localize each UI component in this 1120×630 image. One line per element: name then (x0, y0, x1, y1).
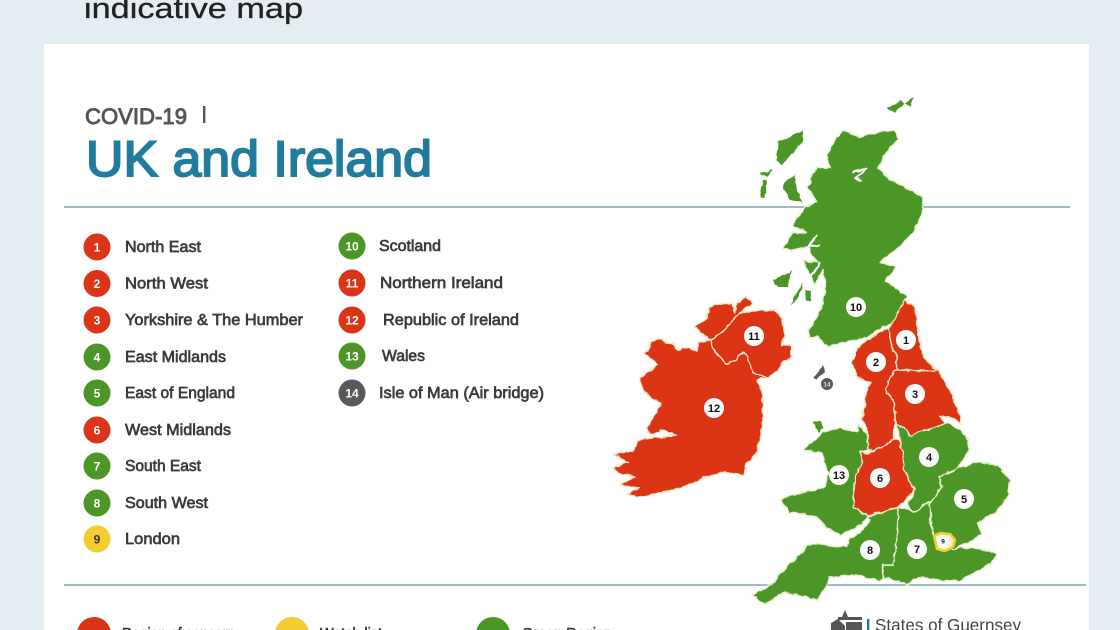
legend item 13: Wales (382, 348, 425, 365)
map region: North East (888, 300, 938, 371)
legend item 12 (338, 306, 519, 334)
map badge 9 (937, 535, 949, 547)
map badge 7 (907, 539, 927, 559)
map badge 5: 5 (961, 494, 967, 506)
legend item 14 (338, 380, 544, 406)
legend item 3 (84, 306, 303, 334)
legend item 5 (84, 380, 235, 406)
legend item 6: 6 (94, 424, 101, 438)
legend item 9: London (125, 531, 180, 548)
legend item 4 (84, 344, 226, 370)
legend item 11: Northern Ireland (380, 275, 503, 292)
legend item 7 (84, 452, 202, 480)
legend item 2 (84, 270, 209, 297)
icon: crest (831, 610, 862, 630)
key item: region of concern (77, 617, 235, 630)
map region: Northern Ireland (710, 310, 792, 377)
legend item 8 (84, 490, 209, 516)
legend item 1: 1 (94, 240, 101, 254)
legend item 12: 12 (345, 314, 359, 328)
legend item 6: West Midlands (125, 422, 231, 439)
map region: London (934, 533, 955, 551)
map badge 11 (744, 326, 764, 346)
map region: East of England (930, 462, 1010, 549)
key: region status (77, 617, 612, 630)
key item: green region (476, 617, 612, 630)
legend item 4: 4 (94, 350, 101, 364)
map badge 14 (821, 378, 833, 390)
map badge 7: 7 (914, 544, 920, 556)
legend item 1: North East (125, 239, 202, 256)
map region: Isle of Man (813, 366, 824, 379)
map badge 8 (860, 540, 880, 560)
map region: North West (852, 328, 897, 450)
legend item 11 (338, 270, 503, 296)
legend item 9: 9 (94, 532, 101, 546)
legend item 2: 2 (94, 277, 101, 291)
map region: Scotland (760, 97, 923, 347)
legend item 12: Republic of Ireland (383, 312, 519, 329)
map region: Wales (780, 420, 869, 535)
legend item 10: 10 (345, 240, 359, 254)
map badge 4 (919, 447, 939, 467)
map badge 2 (866, 352, 886, 372)
key item: watch list (275, 617, 383, 630)
map badge 6 (870, 468, 890, 488)
legend item 7: South East (125, 458, 202, 475)
legend item 1 (84, 234, 202, 260)
map badge 4: 4 (926, 452, 933, 464)
map badge 13: 13 (833, 470, 845, 482)
map badge 13 (829, 465, 849, 485)
map badge 1: 1 (903, 335, 909, 347)
map region: Yorkshire and The Humber (885, 370, 962, 436)
map badge 5 (954, 489, 974, 509)
map badge 1 (896, 330, 916, 350)
legend item 8: South West (125, 495, 209, 512)
map badge 2: 2 (873, 357, 879, 369)
map region: West Midlands (853, 440, 915, 516)
map region: South West (752, 507, 898, 605)
legend item 3: 3 (94, 314, 101, 328)
legend item 6 (84, 416, 231, 444)
legend item 5: East of England (125, 385, 235, 402)
legend item 9 (84, 526, 180, 552)
legend item 11: 11 (346, 276, 359, 290)
legend item 5: 5 (94, 386, 101, 400)
legend item 14: Isle of Man (Air bridge) (379, 385, 544, 402)
map badge 12: 12 (708, 403, 720, 415)
map: UK and Ireland regions (613, 97, 1010, 605)
map badge 6: 6 (877, 473, 883, 485)
legend item 2: North West (125, 276, 209, 292)
map region: Republic of Ireland (613, 297, 767, 497)
map badge 14: 14 (823, 382, 831, 388)
legend item 4: East Midlands (125, 349, 226, 366)
logo: States of Guernsey (831, 610, 1021, 630)
legend item 10 (338, 232, 441, 260)
map badge 12 (704, 398, 724, 418)
map badge 8: 8 (867, 545, 873, 557)
map badge 10 (846, 297, 866, 317)
legend item 8: 8 (94, 496, 101, 510)
map badge 3 (905, 384, 925, 404)
legend item 7: 7 (94, 460, 101, 474)
map badge 10: 10 (850, 302, 862, 314)
legend: numbered regions list (84, 232, 544, 552)
title: UK and Ireland: UK and Ireland (86, 131, 432, 187)
legend item 3: Yorkshire & The Humber (125, 312, 303, 329)
map badge 9: 9 (941, 538, 945, 546)
legend item 10: Scotland (379, 238, 441, 255)
map region: East Midlands (896, 422, 970, 512)
legend item 13: 13 (345, 350, 359, 364)
legend item 14: 14 (345, 386, 359, 400)
legend item 13 (338, 342, 425, 370)
title: COVID-19 label: COVID-19 (85, 104, 187, 129)
map badge 3: 3 (912, 389, 918, 401)
map badge 11: 11 (748, 331, 760, 343)
map region: South East (883, 501, 997, 585)
